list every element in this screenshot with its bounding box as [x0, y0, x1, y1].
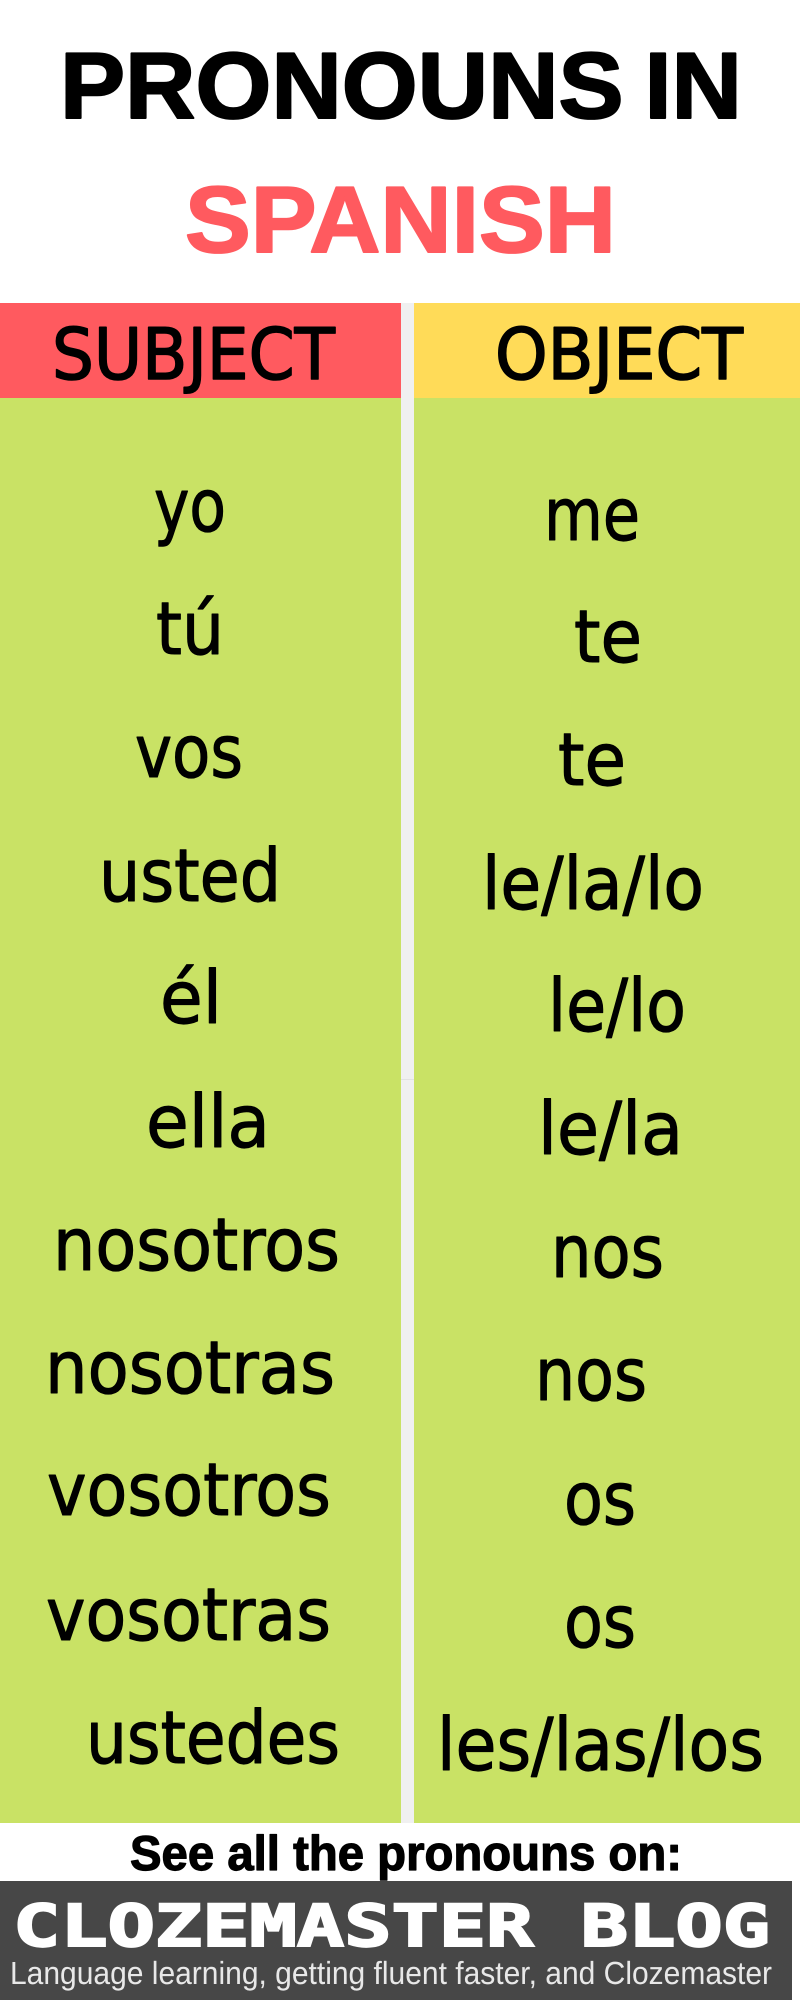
object pronoun: nos: nos [551, 1210, 664, 1295]
call to action text: See all the pronouns on: [130, 1827, 682, 1881]
subject pronoun: vosotras: vosotras [46, 1573, 331, 1658]
subject header label: SUBJECT [52, 313, 336, 396]
object pronoun: nos: nos [535, 1333, 647, 1418]
object body panel [414, 398, 800, 1823]
object pronoun: os: os [564, 1457, 636, 1542]
banner tagline: Language learning, getting fluent faster, and Clozemaster [10, 1955, 772, 1991]
subject pronoun: vos: vos [135, 710, 243, 795]
subject header band [0, 303, 401, 398]
subject pronoun: vosotros: vosotros [47, 1448, 331, 1533]
subject pronoun: ustedes: ustedes [86, 1696, 340, 1781]
object pronoun: les/las/los: les/las/los [437, 1703, 764, 1788]
subject body panel [0, 398, 401, 1823]
object header label: OBJECT [495, 313, 744, 396]
object header band [414, 303, 800, 398]
subject pronoun: yo: yo [154, 464, 226, 549]
subject pronoun: nosotros: nosotros [53, 1203, 340, 1288]
object pronoun: le/la/lo: le/la/lo [482, 842, 704, 927]
title line: spanish: SPANISH [185, 167, 616, 272]
panel: object column [414, 303, 800, 1823]
object pronoun: le/lo: le/lo [548, 964, 686, 1049]
object pronoun: le/la: le/la [538, 1087, 683, 1172]
banner background [0, 1881, 792, 2000]
subject pronoun: tú: tú [156, 587, 224, 672]
panel: clozemaster blog banner [0, 1881, 792, 2000]
subject pronoun: nosotras: nosotras [45, 1326, 335, 1411]
object pronoun: te: te [558, 718, 626, 803]
title line: pronouns in: PRONOUNS IN [60, 33, 742, 138]
object pronoun: os: os [564, 1580, 636, 1665]
object pronoun: me: me [544, 473, 640, 558]
subject pronoun: ella: ella [146, 1080, 270, 1165]
subject pronoun: usted: usted [99, 834, 281, 919]
banner logo wordmark: CLOZEMASTER BLOG [13, 1892, 770, 1960]
subject pronoun: él: él [160, 956, 222, 1041]
object pronoun: te: te [574, 595, 642, 680]
panel: subject column [0, 303, 401, 1823]
title [60, 33, 742, 272]
